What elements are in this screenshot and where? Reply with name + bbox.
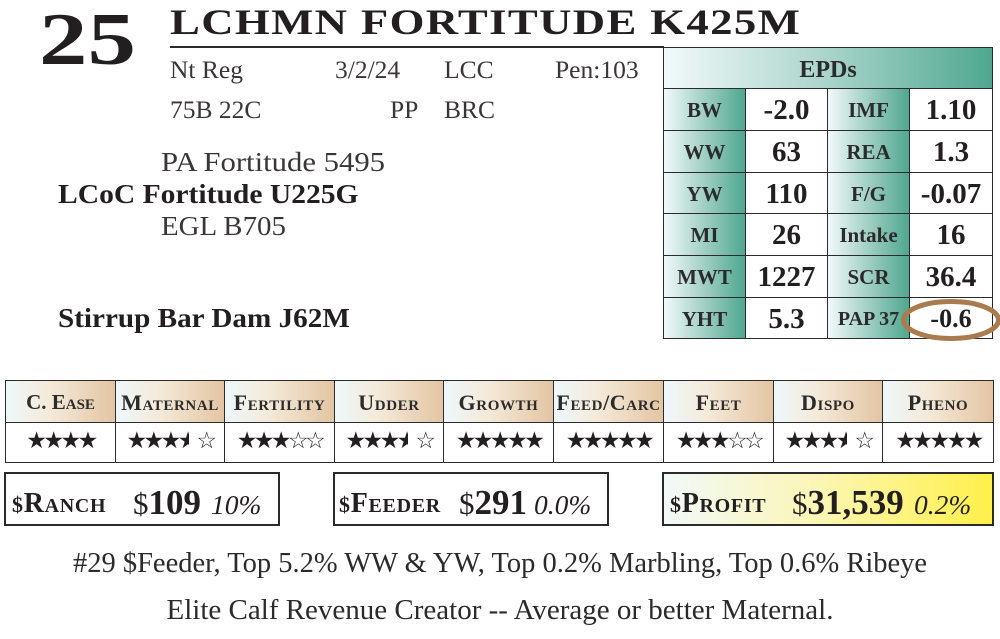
pedigree: sire: LCoC Fortitude U225G [58, 179, 359, 209]
lot number: 25 [39, 0, 136, 81]
$Profit box: $31,539 [792, 483, 904, 522]
info line one: 3/2/24 [335, 55, 400, 84]
$Feeder box: $Feeder [339, 488, 441, 519]
panel: EPDs table: -2.0 [764, 94, 809, 126]
EPD header: EPDs [799, 57, 857, 83]
panel: EPDs table: -0.6 [930, 304, 972, 333]
panel: EPDs table: 1.10 [926, 94, 976, 126]
panel: EPDs table: YW [686, 182, 723, 206]
comment line one: #29 $Feeder, Top 5.2% WW & YW, Top 0.2% Marbling, Top 0.6% Ribeye [73, 548, 927, 579]
panel: EPDs table: 63 [772, 136, 801, 168]
panel: EPDs table: WW [684, 140, 726, 164]
heading rule [170, 46, 664, 48]
$Profit box: $Profit [670, 488, 766, 519]
panel: EPDs table: 16 [936, 219, 966, 251]
$Ranch box: 10% [211, 489, 261, 520]
panel: trait ratings table: ★★★☆☆ [237, 428, 322, 454]
panel: EPDs table: IMF [848, 98, 889, 122]
$Feeder box: $291 [459, 483, 527, 522]
panel: EPDs table: 1227 [758, 261, 816, 293]
panel: EPDs table: 36.4 [926, 261, 976, 293]
info line one: Pen:103 [555, 55, 639, 84]
panel: trait ratings table: Dispo [801, 390, 855, 414]
panel: trait ratings table: Growth [459, 390, 538, 414]
pedigree: sire's sire: PA Fortitude 5495 [161, 147, 385, 177]
panel: trait ratings table: C. Ease [26, 390, 95, 414]
panel: trait ratings table: Feet [696, 390, 741, 414]
panel: EPDs table: F/G [851, 182, 886, 206]
panel: trait ratings table: ★★★ ☆ [345, 428, 433, 454]
info line two: 75B 22C [170, 95, 261, 124]
panel: EPDs table: REA [846, 140, 891, 164]
panel: EPDs table: PAP 37 [838, 308, 899, 330]
info line one: LCC [444, 55, 494, 84]
panel: EPDs table: YHT [682, 306, 727, 330]
bull name heading: LCHMN FORTITUDE K425M [170, 2, 801, 42]
panel: EPDs table: 26 [772, 219, 801, 251]
panel: trait ratings table: ★★★ ☆ [126, 428, 214, 454]
pedigree: sire's dam: EGL B705 [161, 211, 286, 241]
panel: trait ratings table: ★★★★★ [895, 428, 981, 454]
panel: trait ratings table: ★★★ ☆ [784, 428, 872, 454]
panel: trait ratings table [5, 380, 994, 463]
pedigree: dam: Stirrup Bar Dam J62M [58, 303, 350, 333]
$Profit box [662, 472, 994, 526]
panel: EPDs table: 110 [766, 178, 807, 210]
info line one [170, 55, 639, 84]
info line two [170, 95, 495, 124]
$Feeder box: 0.0% [534, 489, 591, 520]
panel: EPDs table: MWT [677, 265, 732, 289]
$Ranch box: $Ranch [12, 488, 106, 519]
panel: trait ratings table: ★★★★ [26, 428, 95, 454]
panel: trait ratings table: Fertility [234, 390, 325, 414]
EPD header [663, 47, 993, 89]
panel: EPDs table: SCR [847, 265, 890, 289]
panel: trait ratings table: Pheno [908, 390, 968, 414]
panel: EPDs table: -0.07 [921, 178, 981, 210]
$Feeder box [333, 472, 609, 526]
panel: EPDs table: BW [687, 98, 722, 122]
callout: circled PAP value [901, 299, 1000, 341]
panel: trait ratings table: Feed/Carc [556, 390, 661, 414]
panel: trait ratings table: ★★★★★ [456, 428, 541, 454]
info line two: BRC [444, 95, 495, 124]
panel: EPDs table: Intake [839, 223, 898, 247]
info line one: Nt Reg [170, 55, 243, 84]
panel: trait ratings table: Maternal [121, 390, 219, 414]
comment line two: Elite Calf Revenue Creator -- Average or better Maternal. [166, 594, 833, 626]
panel: EPDs table: 1.3 [933, 136, 969, 168]
panel: EPDs table: 5.3 [768, 302, 805, 334]
$Profit box: 0.2% [914, 489, 971, 520]
$Ranch box: $109 [133, 483, 201, 522]
panel: EPDs table [663, 47, 993, 339]
$Ranch box [4, 472, 280, 526]
panel: trait ratings table: ★★★★★ [566, 428, 651, 454]
panel: trait ratings table: Udder [358, 390, 420, 414]
panel: trait ratings table: ★★★☆☆ [676, 428, 761, 454]
panel: EPDs table: MI [690, 223, 718, 247]
info line two: PP [390, 95, 418, 124]
